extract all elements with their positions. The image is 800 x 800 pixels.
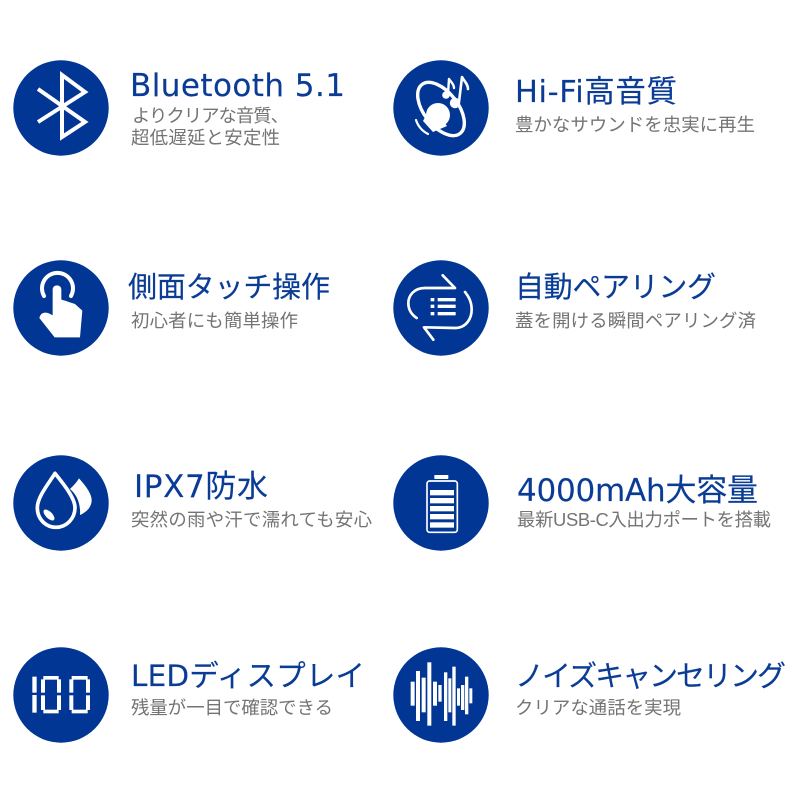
panel: side touch — [13, 260, 330, 356]
heading: 4000mAh大容量: 4000mAh大容量 — [517, 473, 758, 509]
text: battery description: 最新USB-C入出力ポートを搭載 — [517, 509, 771, 530]
panel: LED display — [13, 647, 365, 743]
heading: LEDディスプレイ: LEDディスプレイ — [131, 659, 365, 693]
icon: water drops — [13, 455, 109, 551]
text: noise cancelling description: クリアな通話を実現 — [515, 697, 681, 718]
panel: IPX7 — [13, 455, 372, 551]
text: pairing description: 蓋を開ける瞬間ペアリング済 — [515, 310, 756, 331]
text: Bluetooth description: 超低遅延と安定性 — [131, 127, 280, 148]
heading: ノイズキャンセリング: ノイズキャンセリング — [515, 659, 786, 693]
text: IPX7 description: 突然の雨や汗で濡れても安心 — [131, 509, 372, 530]
heading: Bluetooth 5.1: Bluetooth 5.1 — [130, 68, 345, 104]
icon: pairing arrows and list — [393, 260, 489, 356]
heading: IPX7防水: IPX7防水 — [134, 469, 268, 505]
text: Bluetooth description — [131, 105, 289, 148]
icon: touch hand — [13, 260, 109, 356]
icon: LED digits 100 — [13, 647, 109, 743]
text: touch description: 初心者にも簡単操作 — [131, 310, 298, 331]
text: LED description: 残量が一目で確認できる — [131, 697, 333, 718]
heading: 側面タッチ操作: 側面タッチ操作 — [128, 270, 330, 304]
heading: Hi-Fi高音質: Hi-Fi高音質 — [515, 75, 677, 110]
heading: 自動ペアリング: 自動ペアリング — [515, 270, 716, 304]
icon: sound waveform — [393, 647, 489, 743]
panel: Hi-Fi — [393, 60, 755, 156]
panel: Bluetooth 5.1 — [13, 60, 345, 156]
panel: auto pairing — [393, 260, 756, 356]
panel: noise cancelling — [393, 647, 786, 743]
icon: speaker and notes — [393, 60, 489, 156]
icon: battery — [393, 455, 489, 551]
text: Bluetooth description: よりクリアな音質、 — [132, 105, 289, 126]
text: Hi-Fi description: 豊かなサウンドを忠実に再生 — [515, 114, 755, 135]
panel: battery — [393, 455, 771, 551]
icon: bluetooth — [13, 60, 109, 156]
